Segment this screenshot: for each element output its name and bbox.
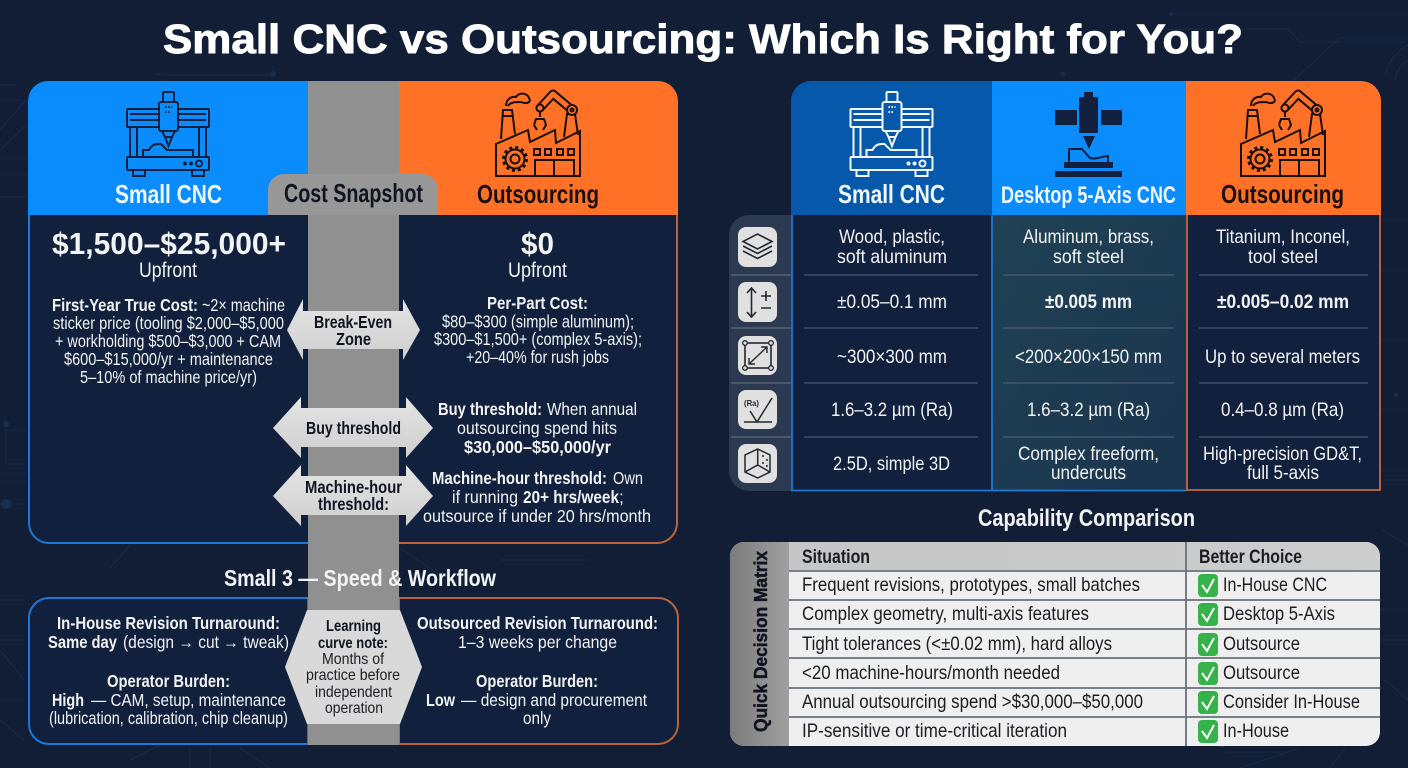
heading: Small 3 Speed and Workflow: Small 3 — Speed & Workflow — [224, 565, 496, 591]
icon: tolerance — [738, 282, 777, 322]
icon: small CNC machine (white) — [850, 92, 932, 176]
text block: small CNC upfront cost: $1,500–$25,000+ — [52, 226, 286, 261]
text block: buy threshold detail: When annual — [547, 399, 637, 419]
heading: Small CNC: Small CNC — [115, 179, 222, 209]
icon: factory with robot arm (right table) — [1241, 94, 1325, 176]
text block: in-house workflow: Operator Burden: — [107, 671, 230, 691]
arrow: break-even zone: Break-Even — [314, 312, 392, 332]
better choice column: Outsource — [1223, 633, 1300, 655]
text block: outsourced workflow — [417, 613, 658, 728]
icon: surface finish: (Ra) — [744, 399, 759, 408]
text block: in-house workflow: (design → cut → tweak) — [123, 632, 289, 652]
heading tab: Cost Snapshot — [268, 174, 438, 215]
text block: in-house workflow: — CAM, setup, maintenance — [91, 690, 286, 710]
table header: Situation — [802, 546, 870, 568]
callout: learning curve note: practice before — [306, 667, 400, 684]
icon: work envelope — [738, 336, 777, 375]
situation column: Frequent revisions, prototypes, small batches — [802, 574, 1140, 596]
heading: Outsourcing column: Outsourcing — [1221, 179, 1344, 209]
better choice column: In-House — [1223, 720, 1289, 742]
title: Small CNC vs Outsourcing: Which Is Right for You? — [163, 16, 1243, 62]
better choice column: In-House CNC — [1223, 574, 1327, 596]
column: outsourcing values: Up to several meters — [1205, 346, 1360, 368]
text block: machine-hour threshold detail — [423, 468, 651, 526]
text block: first-year true cost: sticker price (tooling $2,000–$5,000 — [53, 313, 284, 333]
panel: speed and workflow background — [29, 598, 678, 744]
situation column: Annual outsourcing spend >$30,000–$50,000 — [802, 691, 1143, 713]
callout: learning curve note: operation — [325, 700, 383, 717]
text block: first-year true cost: $600–$15,000/yr + maintenance — [64, 349, 273, 369]
column: small CNC values: 2.5D, simple 3D — [833, 453, 950, 475]
text block: in-house workflow — [48, 613, 289, 728]
callout: learning curve note: curve note: — [318, 635, 388, 652]
text block: first-year true cost: 5–10% of machine price/yr) — [80, 367, 257, 387]
text block: machine-hour threshold detail: ; — [619, 487, 624, 507]
column: desktop 5-axis values: <200×200×150 mm — [1015, 346, 1162, 368]
text block: per-part cost: $300–$1,500+ (complex 5-axis); — [434, 329, 642, 349]
heading tab: Cost Snapshot: Cost Snapshot — [284, 178, 423, 208]
text block: outsourcing upfront cost: Upfront — [508, 259, 567, 282]
callout: learning curve note: Months of — [322, 651, 384, 668]
column: outsourcing values: ±0.005–0.02 mm — [1217, 291, 1349, 313]
text block: outsourced workflow: Outsourced Revision Turnaround: — [417, 613, 658, 633]
check icons — [1198, 574, 1218, 743]
text block: first-year true cost: ~2× machine — [202, 295, 285, 315]
column: outsourcing values: tool steel — [1248, 246, 1318, 268]
text block: machine-hour threshold detail: if running — [452, 487, 518, 507]
situation column: IP-sensitive or time-critical iteration — [802, 720, 1067, 742]
text block: outsourcing upfront cost: $0 — [521, 226, 554, 261]
text block: buy threshold detail: Buy threshold: — [438, 399, 542, 419]
column: outsourcing values: Titanium, Inconel, — [1216, 226, 1350, 248]
text block: small CNC upfront cost — [52, 226, 286, 282]
panel: cost snapshot background — [28, 81, 678, 543]
better choice column — [1223, 574, 1360, 742]
text block: per-part cost — [434, 293, 642, 367]
column: desktop 5-axis values: ±0.005 mm — [1045, 291, 1132, 313]
column: outsourcing values: High-precision GD&T, — [1203, 443, 1362, 465]
arrow: break-even zone — [287, 299, 420, 360]
icon: small CNC machine (dark) — [127, 92, 209, 176]
icon: geometry cube — [738, 444, 777, 483]
central gray band — [308, 81, 399, 745]
situation column: Tight tolerances (<±0.02 mm), hard alloys — [802, 633, 1112, 655]
text block: outsourced workflow: Low — [426, 690, 455, 710]
column: desktop 5-axis values: 1.6–3.2 µm (Ra) — [1027, 399, 1150, 421]
arrow: buy threshold: Buy threshold — [306, 418, 401, 438]
column: desktop 5-axis values: Aluminum, brass, — [1023, 226, 1154, 248]
column: outsourcing values: full 5-axis — [1247, 462, 1319, 484]
icon: desktop 5-axis machine — [1055, 92, 1122, 177]
callout: learning curve note: Learning — [326, 618, 381, 635]
better choice column: Desktop 5-Axis — [1223, 603, 1335, 625]
column: desktop 5-axis values: undercuts — [1051, 462, 1126, 484]
text block: in-house workflow: (lubrication, calibration, chip cleanup) — [49, 708, 288, 728]
text block: machine-hour threshold detail: outsource if under 20 hrs/month — [423, 506, 651, 526]
better choice column: Outsource — [1223, 662, 1300, 684]
arrow: break-even zone: Zone — [336, 329, 371, 349]
text block: outsourced workflow: — design and procurement — [461, 690, 647, 710]
text block: buy threshold detail — [438, 399, 637, 457]
text block: in-house workflow: Same day — [48, 632, 117, 652]
column: small CNC values: ~300×300 mm — [837, 346, 947, 368]
panel: capability table background — [791, 81, 1381, 491]
text block: per-part cost: +20–40% for rush jobs — [466, 347, 609, 367]
text block: first-year true cost: + workholding $500–$3,000 + CAM — [55, 331, 281, 351]
icon: factory with robot arm (dark) — [496, 94, 580, 176]
text block: buy threshold detail: $30,000–$50,000/yr — [464, 437, 611, 457]
text block: machine-hour threshold detail: Own — [613, 468, 643, 488]
arrow: machine-hour threshold — [273, 465, 433, 526]
panel: quick decision matrix — [730, 542, 1380, 746]
heading: Desktop 5-Axis CNC column: Desktop 5-Axis CNC — [1001, 182, 1176, 209]
icon: material layers — [738, 227, 777, 267]
text block: outsourced workflow: Operator Burden: — [476, 671, 598, 691]
column: outsourcing values: 0.4–0.8 µm (Ra) — [1221, 399, 1344, 421]
column: small CNC values — [831, 226, 953, 475]
text block: first-year true cost: First-Year True Cost: — [52, 295, 198, 315]
text block: buy threshold detail: outsourcing spend hits — [457, 418, 617, 438]
table header: Better Choice — [1199, 546, 1302, 568]
text block: machine-hour threshold detail: Machine-hour threshold: — [432, 468, 607, 488]
text block: outsourced workflow: only — [523, 708, 551, 728]
column: small CNC values: Wood, plastic, — [839, 226, 945, 248]
vertical label: Quick Decision Matrix: Quick Decision Matrix — [750, 550, 771, 732]
heading: Small CNC column: Small CNC — [838, 179, 945, 209]
text block: per-part cost: $80–$300 (simple aluminum); — [442, 312, 634, 332]
column: desktop 5-axis values: Complex freeform, — [1018, 443, 1159, 465]
column: small CNC values: 1.6–3.2 µm (Ra) — [831, 399, 953, 421]
column: outsourcing values — [1203, 226, 1362, 484]
heading: Outsourcing: Outsourcing — [477, 179, 599, 209]
text block: outsourcing upfront cost — [508, 226, 567, 282]
text block: machine-hour threshold detail: 20+ hrs/week — [523, 487, 619, 507]
text block: small CNC upfront cost: Upfront — [139, 259, 197, 282]
heading: Capability Comparison: Capability Comparison — [978, 505, 1195, 532]
icon: surface finish — [738, 390, 777, 429]
column: desktop 5-axis values: soft steel — [1053, 246, 1124, 268]
icon strip: capability rows — [729, 215, 791, 491]
callout: learning curve note — [285, 610, 422, 724]
column: desktop 5-axis values — [1015, 226, 1162, 484]
situation column: <20 machine-hours/month needed — [802, 662, 1060, 684]
callout: learning curve note: independent — [315, 684, 392, 701]
better choice column: Consider In-House — [1223, 691, 1360, 713]
arrow: machine-hour threshold: threshold: — [318, 494, 389, 514]
text block: first-year true cost — [52, 295, 285, 387]
column: small CNC values: ±0.05–0.1 mm — [837, 291, 947, 313]
column: small CNC values: soft aluminum — [837, 246, 947, 268]
row dividers — [804, 275, 1368, 437]
arrow: buy threshold — [273, 397, 433, 458]
text block: in-house workflow: In-House Revision Turnaround: — [57, 613, 280, 633]
table header — [802, 546, 1302, 568]
arrow: machine-hour threshold: Machine-hour — [305, 477, 402, 497]
text block: per-part cost: Per-Part Cost: — [487, 293, 588, 313]
text block: outsourced workflow: 1–3 weeks per change — [458, 632, 617, 652]
situation column: Complex geometry, multi-axis features — [802, 603, 1089, 625]
situation column — [802, 574, 1143, 742]
text block: in-house workflow: High — [52, 690, 84, 710]
